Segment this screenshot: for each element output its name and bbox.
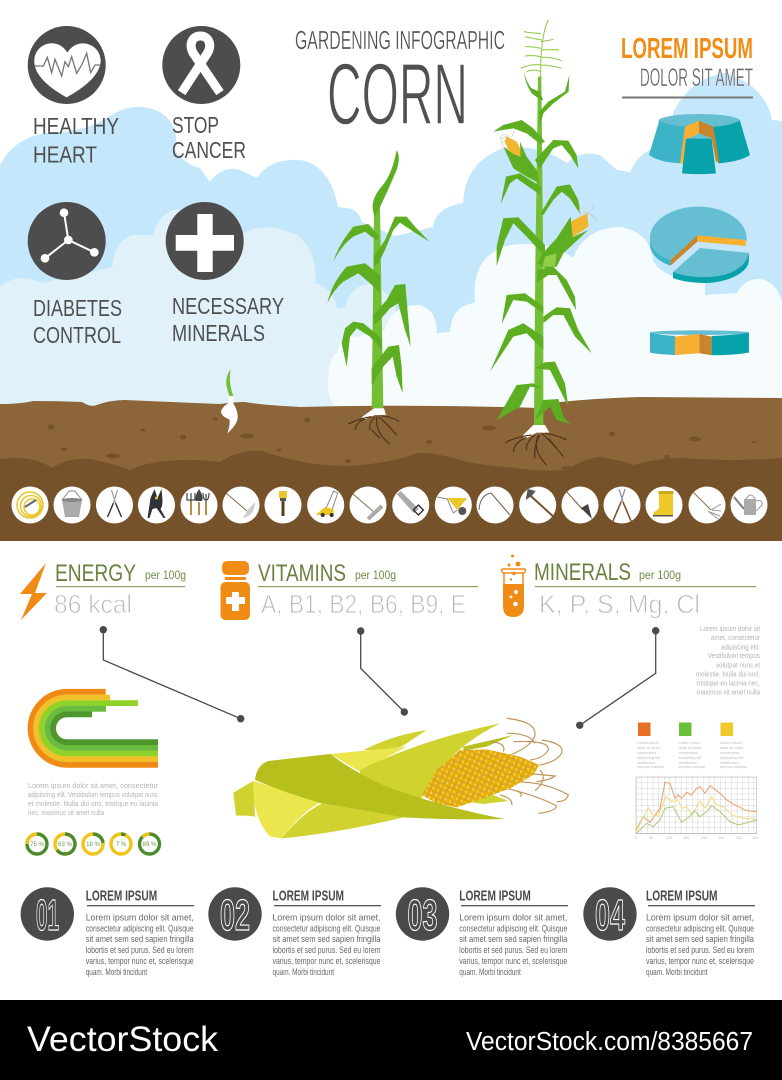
step 02: 02 <box>220 891 250 940</box>
label: healthy heart: HEALTHY <box>33 113 119 139</box>
label: stop cancer: CANCER <box>172 137 246 163</box>
legend: green: consectetur <box>678 751 699 755</box>
step 01: consectetur adipiscing elit. Quisque <box>86 923 194 934</box>
line chart: 350 <box>752 836 758 840</box>
title: GARDENING INFOGRAPHIC <box>295 25 505 55</box>
donut: 63 percent: 63 % <box>58 842 72 848</box>
step 02: LOREM IPSUM <box>272 888 344 904</box>
text block: right caption <box>696 624 761 696</box>
tool: hand tools <box>180 486 218 524</box>
tassel <box>521 20 562 80</box>
step 03: varius, tempor nunc et, scelerisque <box>459 956 567 967</box>
chart: pie with slice <box>650 207 749 283</box>
text block: left caption: adipiscing elit. Vestibulum tempus volutpat nunc <box>28 790 158 799</box>
step 03: 03 <box>408 891 438 940</box>
panel: vitamins <box>220 560 478 620</box>
corn cob <box>233 718 568 838</box>
step 02: sit amet sem sed sapien fringilla <box>272 934 381 945</box>
step 02 <box>208 887 381 978</box>
step 03: quam. Morbi tincidunt <box>459 967 521 978</box>
text block: right caption: adipiscing elit. <box>721 642 760 652</box>
text block: left caption <box>28 781 159 817</box>
text block: left caption: et molestie. Nulla dui orci, tristique eu lacinia <box>28 799 159 808</box>
tool: saw <box>392 486 429 524</box>
tool: shears <box>96 486 133 524</box>
footer: watermark bar: VectorStock.com/8385667 <box>466 1028 753 1056</box>
icon: healthy heart <box>28 26 106 104</box>
step 01: varius, tempor nunc et, scelerisque <box>86 956 194 967</box>
ground <box>0 397 782 541</box>
label: diabetes control <box>33 295 122 348</box>
footer: watermark bar: VectorStock <box>27 1020 219 1059</box>
line chart <box>635 777 758 840</box>
tool: rubber boot <box>646 486 682 524</box>
step 04: LOREM IPSUM <box>646 888 718 904</box>
donut: 89 percent: 89 % <box>143 842 157 848</box>
text block: right caption: Lorem ipsum dolor sit <box>700 624 761 633</box>
legend: orange: Vestibulum <box>637 761 656 765</box>
legend: yellow: Vestibulum <box>720 761 739 765</box>
legend: green: tempus volutpat <box>678 765 706 769</box>
legend: yellow: dolor sit amet, <box>720 746 744 750</box>
icon: molecule <box>28 202 106 280</box>
step 01: lobortis et sed purus. Sed eu lorem <box>86 945 194 956</box>
panel: vitamins: VITAMINS <box>258 560 346 587</box>
step 02: lobortis et sed purus. Sed eu lorem <box>272 945 381 956</box>
label: diabetes control: CONTROL <box>33 322 121 348</box>
step 02: consectetur adipiscing elit. Quisque <box>272 923 380 934</box>
label: necessary minerals: MINERALS <box>172 320 265 346</box>
legend: orange: adipiscing elit <box>637 756 661 760</box>
tool: watering can <box>730 486 768 524</box>
line chart: 300 <box>736 836 742 840</box>
legend: green: adipiscing elit <box>678 756 702 760</box>
step 04: Lorem ipsum dolor sit amet, <box>646 912 754 924</box>
legend: orange: dolor sit amet, <box>637 746 661 750</box>
label: healthy heart <box>33 113 119 168</box>
seedling <box>221 369 238 433</box>
legend: yellow: adipiscing elit <box>720 756 744 760</box>
label: diabetes control: DIABETES <box>33 295 122 321</box>
sky and clouds <box>0 73 782 420</box>
panel: vitamins: per 100g <box>355 570 396 582</box>
step 03: consectetur adipiscing elit. Quisque <box>459 923 567 934</box>
step 03 <box>396 887 568 978</box>
step 02: varius, tempor nunc et, scelerisque <box>272 956 380 967</box>
mature corn plant <box>490 20 597 465</box>
legend: green: Lorem ipsum <box>678 741 700 745</box>
tool: lawn mower <box>307 486 344 524</box>
icon: cancer ribbon <box>162 26 240 104</box>
step 03: LOREM IPSUM <box>459 888 531 904</box>
line chart: 150 <box>683 836 689 840</box>
text block: right caption: Vestibulum tempus <box>708 651 760 660</box>
chart: flat pie <box>650 330 749 355</box>
text block: right caption: maximus sit amet nulla <box>697 688 761 696</box>
tool: leaf rake <box>222 486 260 524</box>
label: necessary minerals: NECESSARY <box>172 293 284 319</box>
line chart: 250 <box>718 836 724 840</box>
label: stop cancer <box>172 112 246 163</box>
tool: axe <box>519 486 556 524</box>
legend: orange: tempus volutpat <box>637 765 665 769</box>
line chart: 100 <box>666 836 672 840</box>
line chart: 50 <box>649 836 653 840</box>
connector: minerals to corn <box>576 627 659 729</box>
tool: pruner <box>138 486 175 524</box>
step 03: lobortis et sed purus. Sed eu lorem <box>459 945 567 956</box>
step 04: 04 <box>595 891 625 940</box>
step 01: sit amet sem sed sapien fringilla <box>86 934 194 945</box>
legend: yellow <box>720 722 748 769</box>
legend: orange <box>637 722 665 769</box>
title: CORN <box>327 46 468 143</box>
text block: right caption: molestie. Nulla dui orci, <box>696 670 760 678</box>
label: stop cancer: STOP <box>172 112 219 138</box>
panel: energy: 86 kcal <box>54 589 132 619</box>
panel: energy <box>20 560 186 620</box>
tool: shovel <box>562 486 598 524</box>
icon: pill bottle <box>220 561 250 620</box>
rainbow arc chart <box>31 692 158 765</box>
young corn plant <box>327 150 429 444</box>
step 03: Lorem ipsum dolor sit amet, <box>459 912 567 924</box>
step 01: LOREM IPSUM <box>86 888 157 904</box>
label: necessary minerals <box>172 293 284 346</box>
step 04: sit amet sem sed sapien fringilla <box>646 934 755 945</box>
legend: orange: Lorem ipsum <box>637 741 659 745</box>
legend: yellow: Lorem ipsum <box>720 741 742 745</box>
connector: vitamins to corn <box>357 627 408 716</box>
step 01 <box>21 887 194 978</box>
panel: minerals: MINERALS <box>534 559 631 586</box>
connector: energy to corn <box>100 626 244 722</box>
step 02: Lorem ipsum dolor sit amet, <box>272 912 380 924</box>
legend: yellow: tempus volutpat <box>720 765 748 769</box>
text block: right caption: amet, consectetur <box>711 633 760 642</box>
line chart: 200 <box>701 836 707 840</box>
text block: left caption: nec, maximus sit amet nulla <box>28 808 105 817</box>
step 04: quam. Morbi tincidunt <box>646 967 708 978</box>
step 01: Lorem ipsum dolor sit amet, <box>86 912 194 924</box>
tool: wheelbarrow <box>435 486 472 524</box>
legend: green: dolor sit amet, <box>678 746 702 750</box>
line chart: 0 <box>635 836 637 840</box>
panel: energy: per 100g <box>145 570 186 582</box>
legend: green: Vestibulum <box>678 761 697 765</box>
panel: minerals: per 100g <box>639 570 681 582</box>
icon: test tube <box>502 554 526 617</box>
tool: paint brush <box>264 486 302 524</box>
donut: 75 percent: 75 % <box>30 842 44 848</box>
tool: scythe <box>476 486 514 524</box>
chart: ring with wedge <box>649 114 750 174</box>
step 01: 01 <box>36 891 59 940</box>
panel: energy: ENERGY <box>55 560 136 587</box>
title <box>295 25 505 143</box>
panel: minerals: K, P, S, Mg, Cl <box>539 589 700 619</box>
step 02: quam. Morbi tincidunt <box>272 967 334 978</box>
tool: loppers <box>604 486 640 524</box>
donut: 7 percent: 7 % <box>116 842 127 848</box>
footer: watermark bar <box>0 1000 782 1080</box>
tool icons row <box>12 486 768 524</box>
legend: yellow: consectetur <box>720 751 740 755</box>
legend: green <box>678 722 706 769</box>
tool: hose <box>12 486 48 524</box>
step 01: quam. Morbi tincidunt <box>86 967 147 978</box>
tool: bucket <box>54 486 90 524</box>
icon: medical cross <box>166 202 244 280</box>
legend: orange: consectetur <box>637 751 657 755</box>
icon: lightning bolt <box>20 563 47 620</box>
text block: right caption: volutpat nunc et <box>716 660 761 670</box>
tool: garden rake <box>350 486 386 524</box>
step 04 <box>583 887 755 978</box>
text block: right caption: tristique eu lacinia nec, <box>697 678 760 688</box>
donut percentages <box>27 834 160 854</box>
subtitle: lorem ipsum <box>621 33 753 98</box>
label: healthy heart: HEART <box>33 142 97 168</box>
step 03: sit amet sem sed sapien fringilla <box>459 934 568 945</box>
panel: vitamins: A, B1, B2, B6, B9, E <box>261 589 466 619</box>
panel: minerals <box>502 554 756 619</box>
donut: 18 percent: 18 % <box>86 842 100 848</box>
tool: pitch fork <box>688 486 726 524</box>
text block: left caption: Lorem ipsum dolor sit amet, consectetur <box>28 781 158 790</box>
